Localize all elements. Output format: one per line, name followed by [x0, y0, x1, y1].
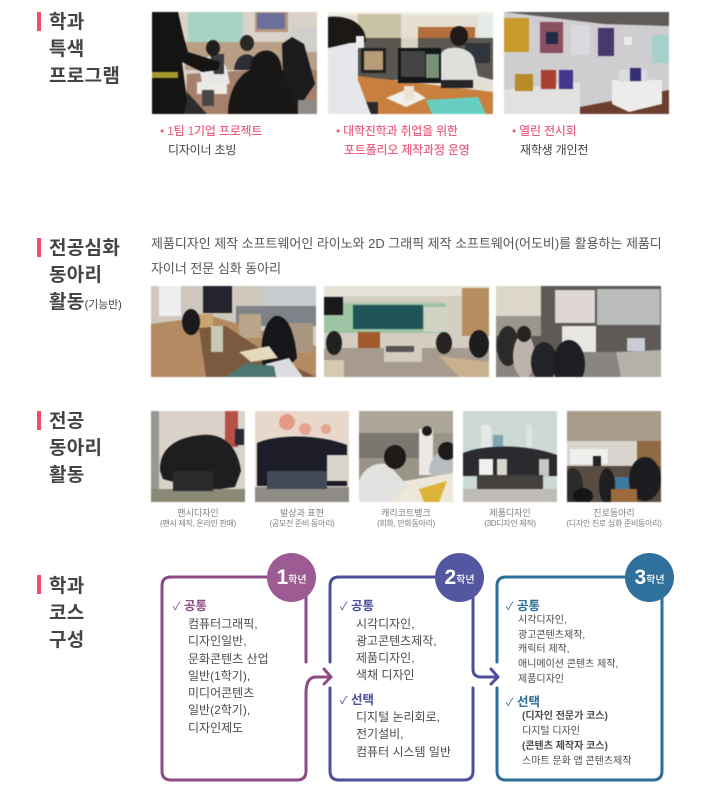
checklist: 선택: ✓ 선택 — [506, 695, 540, 709]
section heading: 전공 동아리 활동: 동아리 — [49, 438, 102, 459]
caption: 열린 전시회: 재학생 개인전 — [520, 142, 588, 156]
photo: club workroom — [150, 285, 317, 378]
caption: 1팀 1기업 프로젝트: • 1팀 1기업 프로젝트 — [160, 124, 262, 138]
caption: 팬시디자인 — [160, 508, 236, 528]
caption: 포트폴리오 제작과정: • 대학진학과 취업을 위한 — [336, 124, 458, 138]
panel: grade 2 — [340, 553, 484, 759]
checklist: 선택 — [506, 695, 632, 767]
photo: open exhibition — [503, 11, 670, 115]
checklist: 공통: 색채 디자인 — [356, 668, 415, 682]
caption: 캐리코트뱅크: 캐리코트뱅크 — [381, 508, 431, 518]
photo: caricature bank club — [358, 410, 454, 503]
checklist: 공통: 광고콘텐츠제작, — [356, 634, 437, 648]
section heading: 학과 특색 프로그램 — [37, 12, 120, 87]
checklist: 공통 — [173, 599, 269, 735]
section heading: 학과 특색 프로그램: 학과 — [49, 12, 85, 33]
photo: team project meeting — [151, 11, 318, 115]
checklist: 선택: 컴퓨터 시스템 일반 — [356, 745, 451, 759]
checklist: 선택: 디지털 논리회로, — [356, 710, 440, 724]
section heading: 전공심화 동아리 활동: 전공심화 — [49, 238, 120, 259]
section heading: 학과 특색 프로그램: 프로그램 — [49, 66, 120, 87]
caption: 제품디자인 — [484, 508, 536, 528]
caption: 1팀 1기업 프로젝트 — [160, 124, 262, 156]
checklist: 공통: 일반(2학기), — [188, 703, 250, 717]
checklist: 공통: 제품디자인, — [356, 651, 415, 665]
caption: 진로동아리: (디자인 진로 심화 준비동아리) — [566, 519, 662, 528]
checklist: 공통: 애니메이션 콘텐츠 제작, — [518, 659, 618, 670]
checklist: 선택: 스마트 문화 앱 콘텐츠제작 — [522, 756, 632, 767]
caption: 팬시디자인: 팬시디자인 — [177, 508, 219, 518]
section heading: 학과 특색 프로그램: 특색 — [49, 39, 85, 60]
section heading: 전공 동아리 활동: 전공 — [49, 411, 85, 432]
caption: 포트폴리오 제작과정: 포트폴리오 제작과정 운영 — [344, 142, 470, 156]
checklist: 공통: 제품디자인 — [518, 674, 564, 685]
badge: 2학년 — [435, 553, 484, 602]
checklist: 선택: (디자인 전문가 코스) — [522, 711, 608, 722]
caption: 진로동아리: 진로동아리 — [593, 508, 635, 518]
checklist: 공통: 일반(1학기), — [188, 669, 250, 683]
caption: 캐리코트뱅크 — [377, 508, 435, 528]
checklist: 공통: 시각디자인, — [356, 616, 415, 630]
badge: 1학년 — [267, 553, 316, 602]
caption: 열린 전시회: • 열린 전시회 — [512, 124, 576, 138]
section heading: 전공심화 동아리 활동 — [37, 238, 122, 313]
checklist: 공통: 광고콘텐츠제작, — [518, 630, 585, 641]
section heading: 학과 코스 구성: 코스 — [49, 603, 85, 624]
badge: 3학년: 3학년 — [634, 566, 665, 589]
checklist: 공통: 시각디자인, — [518, 615, 567, 626]
caption: 제품디자인: (3D디자인 제작) — [484, 519, 536, 528]
badge: 1학년: 1학년 — [276, 566, 307, 589]
checklist: 공통: 캐릭터 제작, — [518, 644, 570, 655]
description text: 제품디자인 제작 소프트웨어인 라이노와 2D 그래픽 제작 소프트웨어(어도비)를 활용하는 제품디 — [151, 236, 662, 251]
section heading: 전공 동아리 활동 — [37, 411, 102, 486]
checklist: 공통: 미디어콘텐츠 — [188, 686, 254, 700]
checklist: 선택: 전기설비, — [356, 727, 404, 741]
caption: 캐리코트뱅크: (회화, 만화동아리) — [377, 519, 435, 528]
caption: 발상과 표현: 발상과 표현 — [280, 508, 324, 518]
section heading: 학과 코스 구성: 학과 — [49, 576, 85, 597]
photo: portfolio production — [327, 12, 494, 115]
photo: career club — [566, 410, 662, 503]
section heading: 전공 동아리 활동: 활동 — [49, 465, 85, 486]
checklist: 선택 — [340, 693, 451, 759]
section heading: 학과 코스 구성 — [37, 575, 85, 651]
checklist: 공통 — [506, 599, 618, 685]
checklist: 선택: 디지털 디자인 — [522, 726, 580, 737]
section heading: 전공심화 동아리 활동: 활동(기능반) — [49, 292, 122, 313]
caption: 진로동아리 — [566, 508, 662, 528]
checklist: 공통: 컴퓨터그래픽, — [188, 617, 258, 631]
section heading: 학과 코스 구성: 구성 — [49, 630, 85, 651]
checklist: 공통: 디자인제도 — [188, 721, 243, 735]
caption: 발상과 표현: (공모전 준비 동아리) — [269, 519, 335, 528]
checklist: 공통: ✓ 공통 — [173, 599, 207, 613]
caption: 제품디자인: 제품디자인 — [489, 508, 531, 518]
photo: idea and expression club — [254, 410, 350, 503]
checklist: 공통: 문화콘텐츠 산업 — [188, 652, 269, 666]
caption: 포트폴리오 제작과정 — [336, 124, 470, 156]
caption: 열린 전시회 — [512, 124, 588, 156]
caption: 1팀 1기업 프로젝트: 디자이너 초빙 — [168, 142, 236, 156]
checklist: 선택: (콘텐츠 제작자 코스) — [522, 741, 608, 752]
photo: fancy design club — [150, 410, 246, 503]
caption: 팬시디자인: (팬시 제작, 온라인 판매) — [160, 519, 236, 528]
checklist: 공통: ✓ 공통 — [340, 599, 374, 613]
description text — [151, 236, 662, 276]
checklist: 공통: ✓ 공통 — [506, 599, 540, 613]
photo: club classroom — [323, 286, 490, 378]
checklist: 선택: ✓ 선택 — [340, 693, 374, 707]
badge: 3학년 — [625, 553, 674, 602]
badge: 2학년: 2학년 — [444, 566, 475, 589]
photo: product design club — [462, 410, 558, 502]
description text: 자이너 전문 심화 동아리 — [151, 260, 281, 276]
checklist: 공통: 디자인일반, — [188, 634, 247, 648]
section heading: 전공심화 동아리 활동: 동아리 — [49, 265, 102, 286]
photo: software lecture — [495, 285, 662, 378]
panel: grade 3 — [506, 553, 674, 767]
panel: grade 1 — [173, 553, 316, 735]
checklist: 공통 — [340, 599, 437, 682]
caption: 발상과 표현 — [269, 508, 335, 528]
